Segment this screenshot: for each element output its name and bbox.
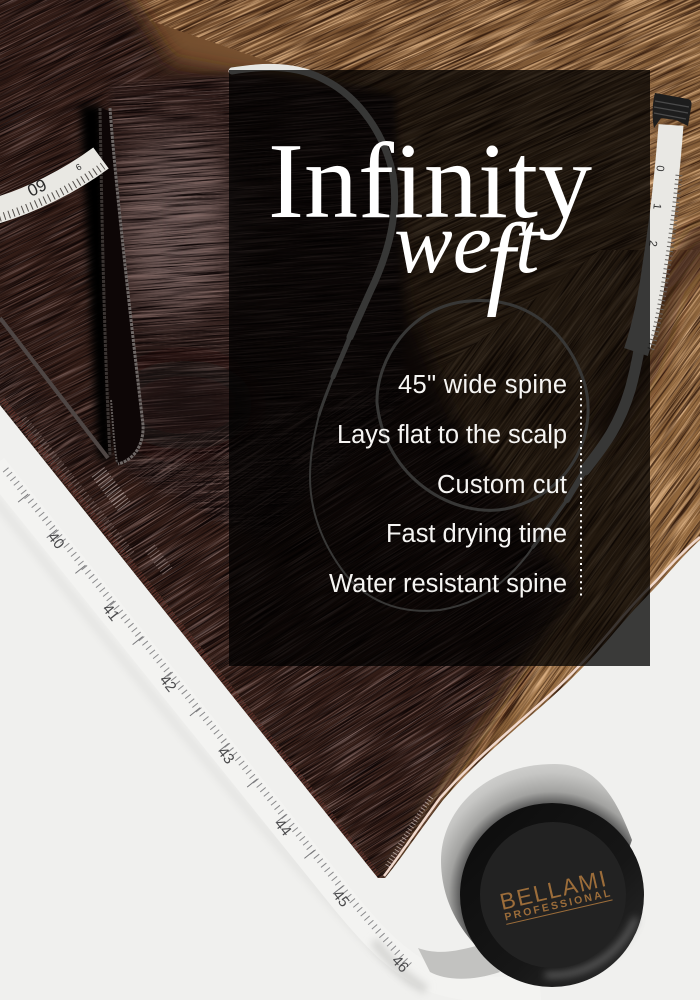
left measuring tape: 09 [24, 175, 50, 201]
inner seam line [0, 318, 108, 458]
title line: weft: we [394, 195, 492, 292]
tape shadow under reel [418, 945, 500, 979]
bottom measuring tape: 42 [156, 672, 180, 696]
translucent dark panel [229, 70, 650, 666]
tape reel with shadow [418, 764, 644, 987]
weft highlighted hair [106, 70, 404, 527]
feature: spine width: 45" wide spine [398, 371, 567, 399]
left hair streaks [350, 500, 351, 501]
feature: drying time: Fast drying time [386, 520, 567, 548]
reel cast shadow [441, 764, 632, 950]
reel body [460, 803, 644, 987]
left measuring tape [0, 158, 103, 219]
bottom measuring tape: 40 [44, 529, 68, 553]
bottom measuring tape [0, 466, 540, 990]
combed lower weft band [2, 400, 378, 876]
weft fold seams [100, 108, 143, 464]
right measuring tape: 2 [646, 240, 659, 247]
brand name: BELLAMI [497, 865, 608, 915]
title line: Infinity: Infinity [268, 122, 592, 241]
bottom measuring tape: 41 [99, 601, 123, 625]
left measuring tape: 6 [74, 162, 83, 173]
tape loop behind panel [232, 67, 644, 611]
right measuring tape [636, 125, 679, 352]
golden hair, right streaks [350, 499, 351, 501]
bottom measuring tape: 44 [271, 816, 295, 840]
title line: weft: t [515, 195, 542, 292]
weft fold shadow [80, 105, 112, 460]
golden hair, upper streaks [350, 500, 351, 501]
feature: lays flat: Lays flat to the scalp [337, 421, 567, 449]
bottom measuring tape: 46 [388, 952, 412, 976]
tape end clip [653, 93, 692, 128]
bottom measuring tape: 45 [329, 887, 353, 911]
feature: custom cut: Custom cut [437, 471, 567, 499]
brand descriptor: PROFESSIONAL [503, 887, 612, 923]
reel lid [480, 822, 626, 968]
lower hair streaks [350, 499, 351, 501]
dark strand patch at right [600, 232, 700, 440]
title [268, 122, 592, 318]
title line: weft: f [486, 203, 527, 318]
bottom measuring tape: 43 [214, 744, 238, 768]
weft fold interior [101, 108, 143, 464]
feature list [329, 371, 567, 598]
dotted vertical rule [580, 380, 582, 598]
right measuring tape: 1 [650, 203, 663, 210]
feature: water resistant: Water resistant spine [329, 570, 567, 598]
brand logo [497, 865, 613, 925]
pale hair tips along right edge [384, 537, 700, 876]
brand underline [506, 900, 613, 924]
right measuring tape: 0 [653, 165, 666, 172]
reel glare [545, 918, 636, 975]
dark brown hair base [0, 0, 575, 890]
